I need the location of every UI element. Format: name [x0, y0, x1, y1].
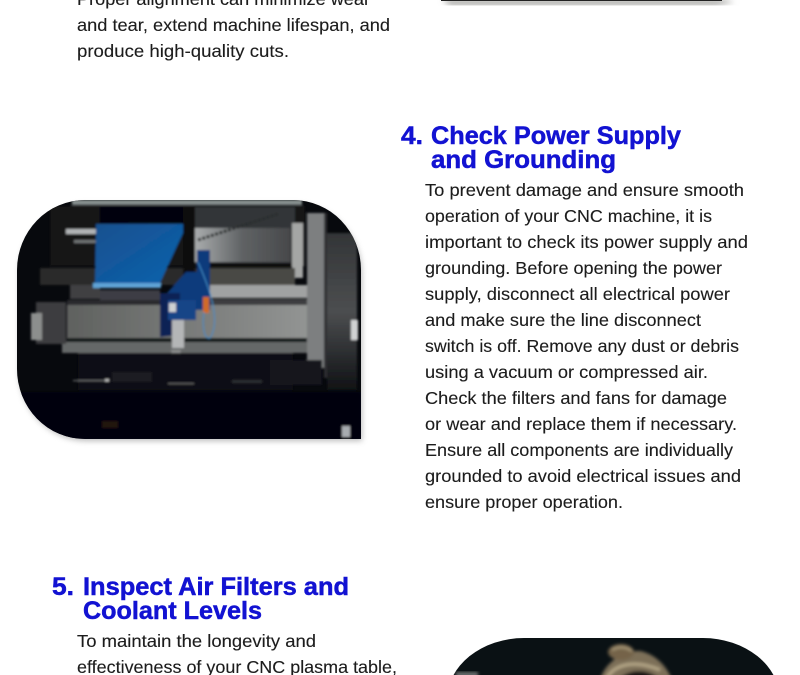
- rack: [210, 285, 315, 298]
- text block: section 4 body: Check the filters and fans for damage: [425, 388, 727, 408]
- previous image bottom edge: [441, 0, 735, 5]
- text block: section 4 body: using a vacuum or compressed air.: [425, 362, 708, 382]
- text block: section 5 body: To maintain the longevity and: [77, 631, 316, 651]
- text block: section 4 body: supply, disconnect all electrical power: [425, 284, 730, 304]
- text block: section 4 body: To prevent damage and ensure smooth: [425, 180, 744, 200]
- text block: section 4 body: ensure proper operation.: [425, 492, 623, 512]
- right column: [307, 213, 324, 368]
- heading: section 4: 4.: [401, 122, 423, 150]
- left motor: [36, 302, 66, 344]
- top light edge: [72, 200, 302, 205]
- text block: section 4 body: important to check its power supply and: [425, 232, 748, 252]
- text block: section 5 body: [77, 631, 397, 675]
- text block: section 4 body: operation of your CNC machine, it is: [425, 206, 712, 226]
- cutting table: [78, 353, 293, 390]
- light wall: [67, 305, 307, 338]
- image: CNC laser machine: [17, 200, 361, 439]
- laser head: [169, 303, 176, 312]
- text block: section 4 body: grounded to avoid electrical issues and: [425, 466, 741, 486]
- gantry: [183, 207, 195, 292]
- text block: section 4 body: and make sure the line disconnect: [425, 310, 701, 330]
- mid band: [40, 266, 199, 287]
- upper dark wall: [50, 206, 305, 266]
- blue shield: [95, 224, 183, 283]
- image shadow: CNC machine: [19, 204, 362, 441]
- heading: section 5: 5.: [52, 573, 74, 601]
- heading: section 5: [52, 573, 349, 625]
- text block: section 4 body: Ensure all components are individually: [425, 440, 733, 460]
- text block: section 4 body: grounding. Before opening the power: [425, 258, 722, 278]
- heading: section 5: Inspect Air Filters and: [83, 573, 349, 601]
- heading: section 5: Coolant Levels: [83, 597, 262, 625]
- text block: section 3 ending: and tear, extend machine lifespan, and: [77, 15, 390, 35]
- steel back wall: [195, 207, 295, 264]
- image: technician with hair bun: [447, 638, 780, 675]
- text block: section 3 ending: [77, 0, 390, 61]
- hair: [600, 651, 672, 675]
- text block: section 4 body: switch is off. Remove any dust or debris: [425, 336, 739, 356]
- text block: section 4 body: [425, 180, 748, 512]
- heading: section 4: Check Power Supply: [431, 122, 681, 150]
- floor: [17, 392, 361, 439]
- text block: section 4 body: or wear and replace them if necessary.: [425, 414, 737, 434]
- text block: section 3 ending: produce high-quality cuts.: [77, 41, 289, 61]
- heading: section 4: and Grounding: [431, 146, 616, 174]
- heading: section 4: [401, 122, 681, 174]
